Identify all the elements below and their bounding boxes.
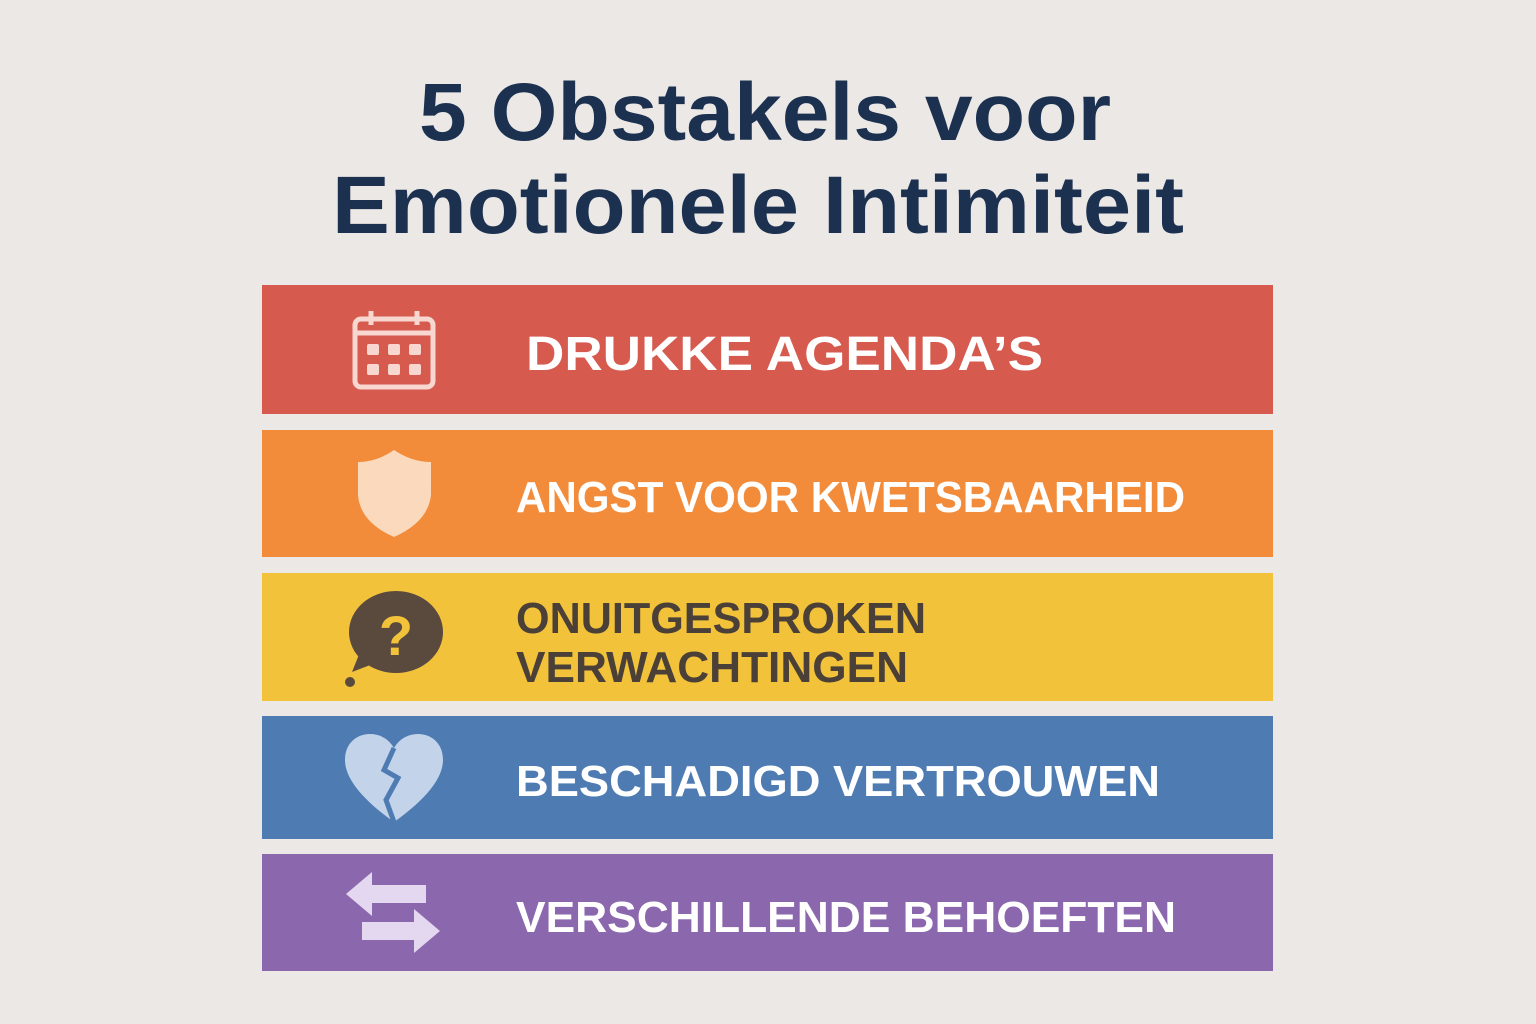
panel: onuitgesproken verwachtingen: [262, 573, 1273, 701]
panel: beschadigd vertrouwen: BESCHADIGD VERTROUWEN: [516, 757, 1160, 806]
title: [332, 67, 1184, 251]
title: Emotionele Intimiteit: [332, 160, 1184, 251]
icon: speech bubble question: ?: [379, 604, 413, 667]
panel: drukke agenda's: DRUKKE AGENDA’S: [526, 328, 1043, 381]
panel: onuitgesproken verwachtingen: VERWACHTINGEN: [516, 643, 908, 692]
title: 5 Obstakels voor: [419, 67, 1111, 158]
panel: verschillende behoeften: VERSCHILLENDE BEHOEFTEN: [516, 893, 1176, 942]
panel: angst voor kwetsbaarheid: ANGST VOOR KWETSBAARHEID: [516, 473, 1185, 522]
icon: speech bubble question: [345, 591, 443, 687]
panel: onuitgesproken verwachtingen: ONUITGESPROKEN: [516, 594, 926, 643]
icon: swap arrows: [346, 872, 440, 953]
panel: beschadigd vertrouwen: [262, 716, 1273, 839]
panel: drukke agenda's: [262, 285, 1273, 414]
panel: verschillende behoeften: [262, 854, 1273, 971]
panel: angst voor kwetsbaarheid: [262, 430, 1273, 557]
icon: shield: [358, 450, 431, 537]
icon: calendar: [355, 311, 433, 387]
icon: broken heart: [345, 734, 443, 822]
